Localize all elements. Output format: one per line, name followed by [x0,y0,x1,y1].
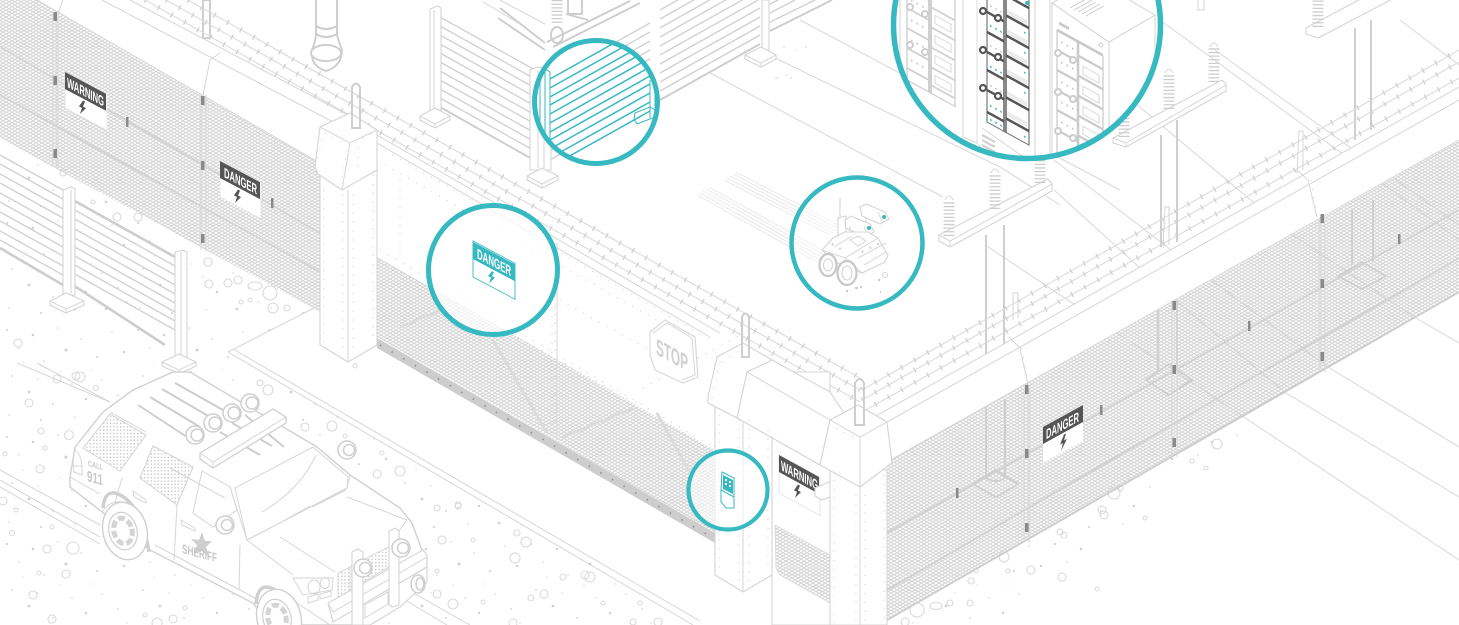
stop sign: STOP [656,334,688,377]
headlights [293,578,333,625]
centre rack dark modules [987,0,1029,145]
left rack [900,0,963,137]
warning sign left [65,72,107,130]
utility poles [939,0,1402,497]
post behind coping top left [203,0,210,38]
robot [820,197,889,292]
pillars beside the door [708,314,860,625]
pole 3 with crossarm and insulators [1306,0,1402,289]
insulator stub [1198,0,1204,10]
windshield [235,447,348,540]
danger sign left [220,161,261,219]
front wheel [251,585,307,625]
gate mesh with concrete kerb [377,257,715,543]
police car [70,372,427,625]
transformer frame top [483,0,640,50]
left chain-link fence [0,0,363,312]
gate panel [377,135,740,445]
barbed wire: right run [862,50,1459,412]
barb post [352,84,360,128]
lamp pedestal [311,0,342,71]
warning sign left: WARNING [67,75,104,110]
call 911 number: 911 [87,468,103,489]
door latch [815,478,847,500]
louver fence: top centre [420,0,832,188]
rear tail lights [73,450,82,475]
callout: patrol robot [792,178,922,308]
callout: danger sign [428,206,558,334]
callout: louver fence [534,23,658,170]
danger sign right: DANGER [1046,409,1079,443]
grille [338,545,392,600]
door handles [133,491,195,531]
pillar left of gate [315,84,377,362]
bull bar [328,528,427,625]
roof lamps [186,394,259,444]
rear wheel [97,493,153,564]
ground wires [710,20,1459,560]
warning sign on door [779,455,820,516]
teal danger sign: DANGER [477,246,511,280]
mirror lamps [216,441,356,534]
left louver fence [0,155,196,374]
post clamps [54,12,274,243]
warning sign on door: WARNING [781,458,818,494]
post clamps [956,214,1400,532]
barbed wire: left run [145,0,860,402]
danger sign left: DANGER [224,165,257,198]
light bar [200,409,286,468]
star [191,532,212,557]
callout: server racks [890,0,1164,162]
sheriff lettering: SHERIFF [182,541,217,565]
door vent mesh [775,525,830,603]
callout: access keypad [688,450,768,530]
side window [140,446,193,505]
centre rack body [976,0,982,148]
right rack [1051,0,1156,154]
rear window [83,414,146,471]
pole 1 with crossarm and insulators [939,160,1052,497]
short fence stakes [1013,131,1303,320]
right chain-link fence [860,87,1459,620]
stop sign [650,320,698,383]
robot tracks [697,172,842,262]
front side window [193,471,237,527]
car body [70,372,427,625]
call 911 lettering: CALL [88,459,103,472]
corner pillar [820,379,892,625]
pole 2 with crossarm and insulators [1113,43,1226,395]
roof rails [138,383,284,455]
slab and road lines [0,305,700,625]
ground gravel: pebbles [0,170,1222,625]
teal keypad [721,472,734,508]
danger sign right [1043,405,1083,463]
